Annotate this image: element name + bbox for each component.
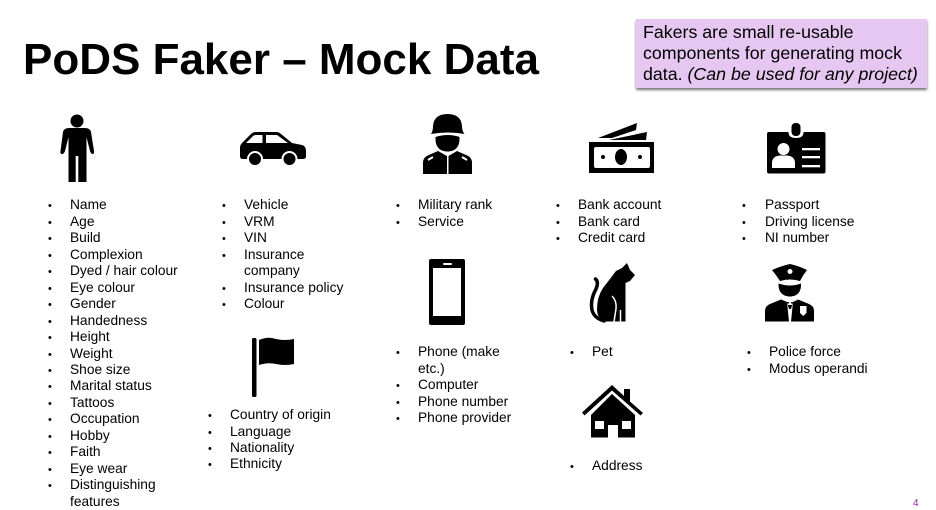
list: vehicle attributes: Colour [244,296,285,311]
list: vehicle attributes [222,197,343,311]
list: vehicle attributes: Insurance [244,247,305,262]
list: identity documents: • [742,233,746,245]
list: person attributes: • [48,200,52,212]
list: phone attributes: • [396,380,400,392]
list: person attributes: • [48,414,52,426]
list: pet: Pet [592,344,613,359]
list: address: Address [592,458,643,473]
list: vehicle attributes: • [222,200,226,212]
list: identity documents: NI number [765,230,830,245]
list: phone attributes: Phone (make [418,344,500,359]
list: police attributes [747,344,868,376]
list: vehicle attributes: • [222,250,226,262]
list: phone attributes: • [396,413,400,425]
list: banking attributes: • [556,200,560,212]
icon: police officer [765,264,814,322]
list: person attributes: Hobby [70,428,110,443]
list: police attributes: • [747,347,751,359]
list: person attributes: • [48,398,52,410]
list: identity documents [742,197,855,245]
list: person attributes: Gender [70,296,116,311]
callout: Fakers are small re-usable [643,22,854,42]
list: person attributes: features [70,494,120,509]
list: person attributes: Shoe size [70,362,131,377]
list: banking attributes [556,197,661,245]
title: PoDS Faker – Mock Data [23,35,539,84]
list: person attributes: • [48,233,52,245]
callout: components for generating mock [643,43,902,63]
list: banking attributes: Credit card [578,230,645,245]
list: military attributes [396,197,492,229]
list: person attributes: Age [70,214,95,229]
list: police attributes: • [747,364,751,376]
icon: flag [252,338,294,397]
list: vehicle attributes: • [222,283,226,295]
list: military attributes: • [396,200,400,212]
list: vehicle attributes: Vehicle [244,197,289,212]
list: phone attributes: Phone number [418,394,509,409]
list: person attributes: • [48,431,52,443]
list: person attributes: Complexion [70,247,143,262]
list: banking attributes: Bank card [578,214,640,229]
list: person attributes: • [48,283,52,295]
list: origin attributes: Nationality [230,440,294,455]
list: person attributes: • [48,447,52,459]
list: pet [570,344,613,359]
list: vehicle attributes: • [222,299,226,311]
list: person attributes: Faith [70,444,101,459]
list: phone attributes: • [396,347,400,359]
list: origin attributes: Language [230,424,292,439]
list: person attributes: Weight [70,346,113,361]
list: military attributes: Military rank [418,197,492,212]
list: address: • [570,461,574,473]
list: address [570,458,643,473]
list: police attributes: Police force [769,344,841,359]
icon: person [60,114,94,182]
list: origin attributes: • [208,443,212,455]
list: phone attributes: Computer [418,377,479,392]
list: military attributes: • [396,217,400,229]
list: person attributes: • [48,316,52,328]
list: origin attributes [208,407,331,471]
list: person attributes: Height [70,329,110,344]
icon: phone [429,259,465,325]
list: origin attributes: • [208,410,212,422]
icon: cat [592,263,635,322]
list: person attributes: Name [70,197,107,212]
list: identity documents: • [742,217,746,229]
list: phone attributes: • [396,397,400,409]
icon: id badge [767,123,826,174]
list: person attributes: Tattoos [70,395,114,410]
list: person attributes: • [48,464,52,476]
list: vehicle attributes: VIN [244,230,267,245]
list: person attributes: • [48,217,52,229]
icon: house [582,385,643,438]
list: pet: • [570,347,574,359]
list: police attributes: Modus operandi [769,361,868,376]
list: person attributes: Build [70,230,101,245]
list: origin attributes: • [208,459,212,471]
list: person attributes: • [48,266,52,278]
list: person attributes: Occupation [70,411,140,426]
list: vehicle attributes: company [244,263,300,278]
list: person attributes: Handedness [70,313,147,328]
list: identity documents: Passport [765,197,819,212]
list: phone attributes: Phone provider [418,410,512,425]
list: identity documents: • [742,200,746,212]
list: person attributes [48,197,178,509]
list: person attributes: Dyed / hair colour [70,263,178,278]
list: person attributes: • [48,480,52,492]
icon: soldier [423,114,472,174]
list: origin attributes: • [208,427,212,439]
callout [636,19,927,88]
list: phone attributes [396,344,512,425]
list: banking attributes: • [556,217,560,229]
callout: data. (Can be used for any project) [643,64,918,84]
list: military attributes: Service [418,214,464,229]
list: person attributes: Eye wear [70,461,128,476]
list: vehicle attributes: VRM [244,214,275,229]
list: banking attributes: • [556,233,560,245]
icon: money [589,123,654,173]
list: vehicle attributes: • [222,233,226,245]
list: banking attributes: Bank account [578,197,661,212]
list: person attributes: • [48,250,52,262]
list: person attributes: • [48,381,52,393]
list: person attributes: • [48,365,52,377]
list: person attributes: Eye colour [70,280,135,295]
list: origin attributes: Country of origin [230,407,331,422]
list: person attributes: • [48,332,52,344]
list: phone attributes: etc.) [418,361,445,376]
list: person attributes: • [48,349,52,361]
list: person attributes: • [48,299,52,311]
list: person attributes: Distinguishing [70,477,156,492]
list: origin attributes: Ethnicity [230,456,282,471]
page number: 4 [913,498,919,509]
icon: car [240,132,306,167]
list: vehicle attributes: Insurance policy [244,280,343,295]
list: person attributes: Marital status [70,378,152,393]
list: identity documents: Driving license [765,214,855,229]
list: vehicle attributes: • [222,217,226,229]
